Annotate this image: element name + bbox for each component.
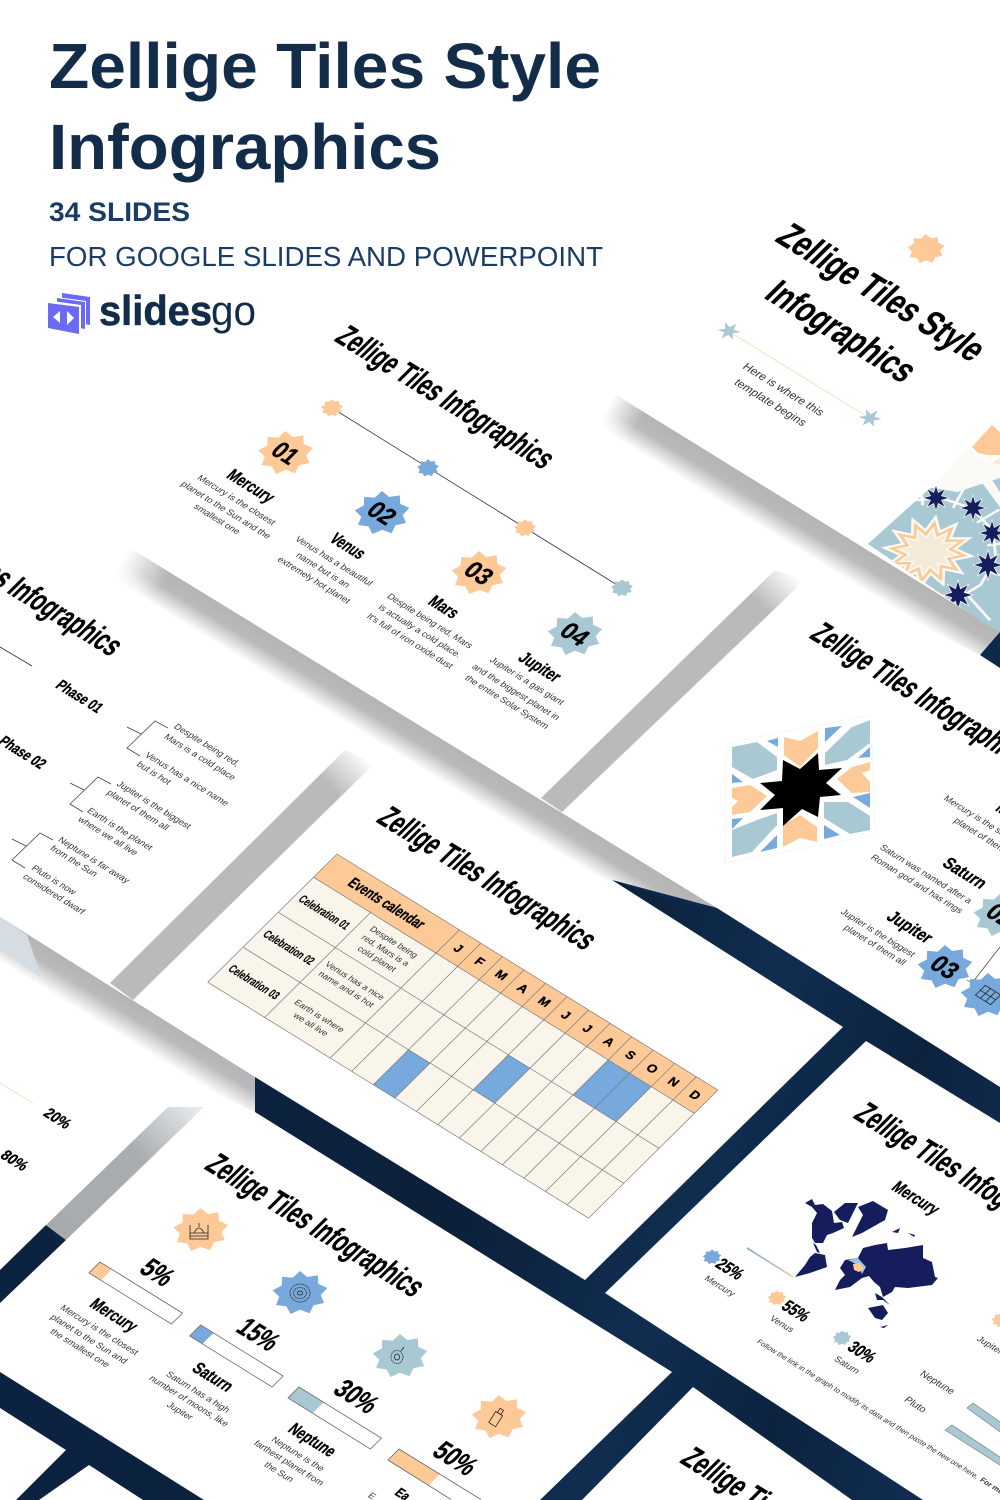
column: Neptune: Neptune — [284, 1420, 341, 1460]
connector line — [967, 947, 1000, 983]
shadow: phases and calendar bottom edge — [0, 917, 255, 1112]
map marker: blue — [848, 1258, 866, 1274]
logo: slidesgo: slides — [99, 287, 212, 334]
step 02 Venus: Venus — [326, 529, 370, 563]
note text: Follow the link in the graph to modify its data and then paste the new one here. — [755, 1338, 981, 1480]
month headers: O — [643, 1061, 661, 1076]
icon: peach star — [900, 228, 952, 269]
month headers: A — [600, 1035, 618, 1049]
subtitle: template begins — [731, 377, 809, 429]
timeline connector line — [332, 408, 622, 588]
bracket text 1: Mars is a cold place — [162, 732, 238, 782]
row labels: Celebration 03 — [225, 962, 283, 1002]
bracket text 3: Pluto is now — [29, 863, 79, 897]
legend: Venus 55%: Venus — [768, 1314, 797, 1334]
step 03 Mars: It's full of iron oxide dust — [365, 612, 456, 671]
bar: Pluto — [945, 1425, 1000, 1467]
bracket text 3: Neptune is far away — [56, 835, 132, 885]
legend: Saturn 30% — [829, 1328, 881, 1376]
navy background band: centre lattice — [255, 880, 1000, 1500]
heading: main title — [49, 30, 601, 183]
legend: Mercury 25%: 25% — [711, 1255, 749, 1283]
title: Zellige Tiles Infographics — [370, 800, 606, 956]
logo: slidesgo — [48, 287, 256, 334]
shadow tint: phases bottom left — [0, 917, 42, 978]
progress bar: 50% — [388, 1449, 481, 1500]
column: Neptune: Neptune is the — [269, 1435, 327, 1473]
row labels: Celebration 01 — [296, 893, 353, 932]
divider line — [0, 1083, 33, 1103]
shadow fade: timeline left end — [105, 546, 178, 615]
text: Saturn — [869, 843, 992, 915]
month headers — [450, 942, 704, 1103]
highlighted cell: row 3 — [373, 1050, 430, 1098]
shadow: timeline right edge — [541, 570, 805, 812]
step 02 Venus: name but is an — [294, 551, 352, 589]
text: Jupiter: Jupiter — [882, 907, 938, 947]
column: Neptune: the Sun — [262, 1460, 296, 1484]
step 04 Jupiter: Jupiter is a gas giant — [488, 655, 567, 707]
shadow: timeline slide bottom edge — [110, 548, 717, 908]
panel: bottom left slide fragment — [0, 1083, 75, 1174]
label: Pluto: Pluto — [901, 1395, 929, 1415]
step 04 Jupiter — [463, 603, 614, 731]
bracket text 2 — [75, 779, 194, 857]
row descriptions: Earth is where — [292, 998, 347, 1034]
month headers: J — [450, 942, 466, 955]
icon: bottle badge — [461, 1386, 538, 1447]
icon: lantern badge — [362, 1325, 439, 1386]
text: Jupiter — [839, 907, 938, 967]
row descriptions: red, Mars is a — [359, 933, 412, 968]
tile pattern — [868, 423, 1000, 632]
row descriptions — [279, 921, 426, 1046]
column: Mercury — [48, 1295, 142, 1369]
column: Mercury: Mercury — [86, 1295, 142, 1335]
row descriptions: Venus has a nice — [323, 960, 387, 1002]
step 01 Mercury: Mercury is the closest — [195, 473, 278, 527]
navy curl under shadow — [612, 880, 717, 908]
step 03 Mars: Despite being red, Mars — [385, 592, 475, 650]
bracket 1 — [127, 721, 168, 756]
icon: rosette badge — [262, 1262, 339, 1323]
text: Saturn: Roman god and has rings — [869, 853, 966, 915]
title: Zellige Tiles Infographics — [328, 319, 564, 475]
panel: percent slide — [48, 1147, 538, 1500]
progress bar: 5% — [89, 1262, 182, 1324]
step 01 Mercury: 01 — [265, 436, 306, 470]
badge 02 — [963, 884, 1000, 945]
world map — [795, 1199, 938, 1328]
map marker: peach — [853, 1263, 864, 1272]
month headers: N — [665, 1075, 682, 1089]
shadow: cover slide bottom edge — [592, 393, 1000, 655]
row labels: Celebration 02 — [260, 928, 318, 967]
text: Jupiter: Jupiter is the biggest — [839, 907, 918, 959]
step 01 Mercury: smallest one — [192, 502, 242, 536]
column: Saturn: number of moons, like — [147, 1374, 231, 1428]
table: events calendar — [208, 854, 718, 1218]
bracket 2 — [70, 777, 111, 812]
bracket text 1: Despite being red, — [172, 722, 242, 768]
panel: timeline slide — [179, 319, 637, 731]
progress bar: 30% — [288, 1387, 381, 1449]
bracket text 2: where we all live — [75, 814, 140, 857]
subtitle: Here is where this — [740, 362, 827, 419]
month headers: F — [471, 955, 488, 969]
step 02 Venus — [275, 482, 421, 606]
shadow fade: cover left end — [590, 391, 655, 455]
arrow line — [0, 647, 32, 666]
legend: Saturn 30%: Saturn — [832, 1354, 862, 1376]
bracket text 3: considered dwarf — [21, 872, 88, 916]
panel: cover slide — [718, 222, 1000, 632]
row descriptions: we all live — [290, 1010, 331, 1038]
column: Neptune: farthest planet from — [252, 1439, 326, 1488]
icon: building star — [950, 964, 1000, 1025]
heading: main title: Infographics — [49, 111, 441, 183]
step 03 Mars: Mars — [424, 592, 464, 622]
progress bar: 15% — [190, 1325, 283, 1387]
heading: main title: Zellige Tiles Style — [49, 30, 601, 102]
row descriptions: name and is hot — [316, 969, 377, 1009]
month headers: D — [686, 1088, 704, 1103]
legend: Mercury 25% — [699, 1247, 749, 1298]
step 04 Jupiter: 04 — [554, 617, 597, 651]
badge 03: 03 — [924, 950, 966, 984]
value: 30%: 30% — [327, 1375, 385, 1419]
legend: Venus 55% — [764, 1288, 815, 1334]
step 03 Mars — [365, 542, 518, 671]
month headers: S — [622, 1048, 639, 1062]
logo: slidesgo: go — [211, 287, 256, 334]
subheading: platforms: FOR GOOGLE SLIDES AND POWERPOINT — [49, 241, 603, 272]
highlighted cells: row 1 — [573, 1060, 651, 1122]
month headers: M — [492, 968, 511, 983]
bracket text 2: Jupiter is the biggest — [115, 779, 194, 831]
bracket text 2: planet of them all — [105, 788, 171, 832]
subheading: slide count: 34 SLIDES — [49, 197, 190, 227]
legend: Jupiter — [975, 1310, 1000, 1356]
title: Zellige Tiles Infographics — [198, 1147, 434, 1303]
column: Saturn: Saturn — [188, 1359, 238, 1395]
legend: Mercury 25%: Mercury — [702, 1274, 738, 1298]
month headers: M — [535, 994, 554, 1010]
bracket 3 — [12, 833, 53, 868]
step 02 Venus: extremely hot planet — [275, 555, 353, 606]
value: 15%: 15% — [230, 1313, 286, 1357]
column: Saturn: Saturn has a high — [164, 1369, 232, 1415]
step 02 Venus: Venus has a beautiful — [293, 534, 375, 588]
bracket text 1: but is hot — [135, 760, 174, 787]
panel: calendar slide — [208, 800, 718, 1218]
label: Mercury: Mercury — [888, 1178, 944, 1218]
icon: teal star right — [855, 406, 885, 430]
month headers: A — [514, 981, 532, 996]
bracket text 1 — [135, 722, 242, 808]
column: Mercury: planet to the Sun and — [48, 1312, 130, 1366]
month headers: J — [558, 1009, 574, 1022]
bar: Neptune — [967, 1403, 1000, 1434]
navy background band: left stub — [0, 1225, 66, 1303]
step 04 Jupiter: and the biggest planet in — [470, 662, 562, 722]
timeline marker stars — [317, 396, 637, 600]
shadow: bottom left slide right edge — [46, 1107, 204, 1240]
value: 5%: 5% — [133, 1254, 181, 1292]
row labels — [225, 893, 353, 1002]
column: Neptune — [252, 1420, 341, 1488]
bracket text 3 — [21, 835, 132, 916]
step 01 Mercury: planet to the Sun and the — [179, 479, 273, 541]
column: Earth — [366, 1485, 414, 1500]
icon: mosque badge — [163, 1199, 239, 1260]
value: 20%: 20% — [39, 1106, 75, 1132]
icon: teal star left — [714, 319, 744, 343]
panel: tile slide — [725, 616, 1000, 1025]
panel: phases slide — [0, 506, 242, 916]
text: Saturn: Saturn was named after a — [878, 843, 975, 906]
label: Neptune: Neptune — [917, 1369, 957, 1397]
label: phase 01: Phase 01 — [52, 678, 106, 716]
bracket text 3: from the Sun — [48, 844, 100, 878]
row descriptions: cold planet — [355, 944, 399, 974]
divider line — [733, 334, 866, 416]
column: Mercury: the smallest one — [48, 1327, 112, 1369]
table header text: Events calendar — [344, 876, 428, 932]
step 01 Mercury: Mercury — [223, 466, 279, 506]
highlighted cell: row 2 — [473, 1055, 530, 1103]
value: 50%: 50% — [426, 1437, 484, 1481]
bracket text 1: Venus has a nice name — [143, 750, 231, 808]
column: Mercury: Mercury is the closest — [58, 1303, 141, 1357]
navy background band: bottom left lattice — [0, 1372, 204, 1500]
month headers: J — [579, 1022, 595, 1035]
illustration: zellige tile — [725, 715, 875, 863]
legend: Saturn 30%: 30% — [843, 1338, 881, 1366]
step 03 Mars: 03 — [458, 556, 500, 590]
badge 03 — [907, 936, 984, 997]
title line two: Infographics — [756, 274, 926, 390]
step 01 Mercury — [179, 422, 324, 541]
panel: map slide — [699, 1096, 1000, 1496]
grid lines — [208, 854, 718, 1218]
legend: Venus 55%: 55% — [777, 1297, 815, 1325]
callout gradient line — [747, 1247, 793, 1278]
text: Saturn: Saturn — [938, 854, 992, 892]
step 04 Jupiter: Jupiter — [514, 648, 566, 686]
bracket text 2: Earth is the planet — [85, 806, 155, 852]
navy background band: top right tip — [980, 627, 1000, 668]
step 02 Venus: 02 — [361, 496, 403, 530]
step 03 Mars: is actually a cold place. — [376, 603, 464, 659]
step 04 Jupiter: the entire Solar System — [463, 673, 551, 731]
shadow: phases slide right edge — [110, 750, 375, 1000]
row descriptions: Despite being — [368, 924, 420, 960]
text: Jupiter: planet of them all — [842, 923, 908, 967]
column: Saturn: Jupiter — [165, 1400, 195, 1422]
